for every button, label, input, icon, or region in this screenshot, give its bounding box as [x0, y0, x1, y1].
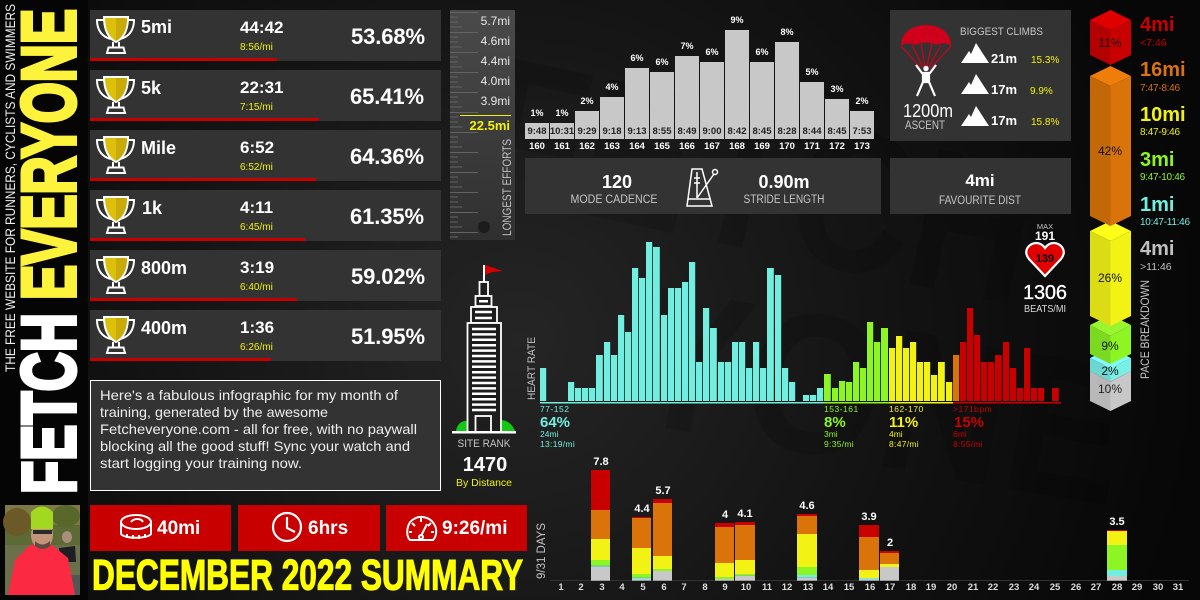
zone label: 153-161: [824, 404, 859, 449]
chart: cadence histogram: 1%: [530, 108, 544, 118]
icon: speedometer: [407, 517, 436, 540]
panel: 5mi record: 53.68%: [351, 24, 425, 49]
bars: zone 77-152: [540, 242, 823, 401]
icon: clock: [273, 513, 301, 541]
panel: 5k record: [90, 70, 441, 121]
panel: mile record: 6:52/mi: [240, 162, 273, 173]
pace legend: 1mi: [1140, 194, 1174, 216]
bar: pace transition: [953, 355, 959, 401]
day labels: 19: [926, 582, 936, 593]
panel: 5mi record: [90, 10, 441, 61]
text block: intro: Here's a fabulous infographic for my month of: [100, 387, 398, 403]
day labels: 23: [1009, 582, 1019, 593]
day labels: 30: [1153, 582, 1163, 593]
panel: cadence and stride: MODE CADENCE: [570, 194, 658, 206]
day labels: 7: [681, 582, 687, 593]
heart rate summary: [1023, 222, 1067, 315]
zone label: over 171: >171bpm: [953, 404, 992, 414]
panel: 400m record: 51.95%: [351, 324, 425, 349]
segment: under 7:46: [1090, 10, 1131, 65]
panel: longest efforts ruler: 3.9mi: [481, 94, 510, 108]
bar: day 16: 3.9: [861, 511, 877, 523]
stat: total time: [238, 505, 380, 551]
panel: cadence and stride: STRIDE LENGTH: [744, 194, 824, 206]
panel: longest efforts ruler: 4.4mi: [481, 54, 510, 68]
chart: cadence histogram: 2%: [855, 96, 869, 106]
day labels: 11: [762, 582, 773, 593]
day labels: 25: [1050, 582, 1061, 593]
day labels: 16: [865, 582, 875, 593]
day labels: 2: [578, 582, 584, 593]
chart: cadence histogram: 9:48: [527, 126, 547, 137]
title: DECEMBER 2022 SUMMARY: [92, 552, 523, 600]
bar: day 17: [880, 537, 899, 581]
zone label: over 171: 8:55/mi: [953, 439, 983, 449]
chart: daily distance: [536, 456, 1189, 593]
segment: 10:47-11:46: [1090, 348, 1131, 381]
text block: intro: [90, 380, 440, 490]
panel: ascent and climbs: 17m: [991, 113, 1017, 128]
bar: day 28: [1107, 516, 1127, 581]
background watermark: [461, 14, 1144, 549]
stat: total distance: [90, 505, 231, 551]
panel: favourite distance: 4mi: [965, 171, 995, 190]
bar: day 16: [859, 511, 879, 581]
day labels: 18: [906, 582, 916, 593]
chart: cadence histogram: 8%: [780, 27, 794, 37]
chart: cadence histogram: 9:13: [627, 126, 647, 137]
segment: over 11:46: [1090, 361, 1131, 411]
day labels: 15: [844, 582, 855, 593]
heart rate summary: BEATS/MI: [1024, 304, 1066, 315]
chart: cadence histogram: 161: [554, 141, 571, 152]
panel: ascent and climbs: 1200m: [903, 101, 953, 121]
chart: cadence histogram: 6%: [630, 53, 644, 63]
day labels: 26: [1071, 582, 1081, 593]
panel: ascent and climbs: BIGGEST CLIMBS: [960, 26, 1043, 38]
panel: 5mi record: 5mi: [141, 17, 172, 37]
chart: heart rate: [526, 242, 1061, 449]
day labels: 22: [988, 582, 998, 593]
panel: 400m record: [90, 310, 441, 361]
icon: trophy: [97, 197, 134, 233]
heart rate summary: 191: [1035, 229, 1055, 243]
pace legend: 7:47-8:46: [1140, 83, 1180, 94]
panel: ascent and climbs: 17m: [991, 82, 1017, 97]
chart: cadence histogram: 10:31: [550, 126, 575, 137]
panel: 800m record: 800m: [141, 258, 187, 278]
chart: cadence histogram: 162: [579, 141, 595, 152]
stat: average pace: 9:26/mi: [442, 518, 507, 539]
icon: heart: [1026, 243, 1064, 276]
panel: 1k record: 6:45/mi: [240, 222, 273, 233]
day labels: 13: [803, 582, 813, 593]
chart: cadence histogram: 8:42: [727, 126, 747, 137]
logo: fetcheveryone: [7, 9, 92, 494]
bar: day 5: 4.4: [634, 503, 651, 515]
panel: 1k record: 61.35%: [350, 204, 424, 229]
chart: cadence histogram: 8:45: [827, 126, 847, 137]
bar: day 17: 2: [887, 537, 893, 549]
chart: cadence histogram: 168: [729, 141, 745, 152]
zone label: over 171: 6mi: [953, 429, 967, 439]
zone label: 77-152: 64%: [540, 414, 570, 431]
heart rate summary: 139: [1036, 253, 1054, 265]
panel: 400m record: 1:36: [240, 318, 274, 337]
icon: trophy: [97, 317, 134, 353]
chart: cadence histogram: 7:53: [852, 126, 872, 137]
panel: ascent and climbs: 9.9%: [1030, 86, 1053, 97]
icon: trophy: [97, 257, 134, 293]
zone label: over 171: [953, 404, 992, 449]
zone label: over 171: 15%: [954, 414, 984, 431]
chart: cadence histogram: 166: [679, 141, 695, 152]
day labels: 10: [741, 582, 751, 593]
segment: 10:47-11:46: 2%: [1101, 364, 1119, 378]
day labels: 21: [968, 582, 979, 593]
icon: mountain: [961, 74, 989, 94]
panel: mile record: [90, 130, 441, 181]
zone label: 153-161: 9:35/mi: [824, 439, 854, 449]
heart rate summary: MAX: [1037, 222, 1053, 231]
chart: cadence histogram: 171: [804, 141, 821, 152]
zone label: 77-152: 77-152: [540, 404, 569, 414]
panel: 5mi record: 44:42: [240, 18, 283, 37]
day labels: [558, 582, 1184, 593]
segment: under 7:46: 11%: [1098, 36, 1122, 50]
bar: day 3: [591, 456, 610, 581]
chart: pace breakdown stack: [1090, 10, 1131, 411]
day labels: 20: [947, 582, 957, 593]
icon: mountain: [961, 43, 989, 63]
site rank text: By Distance: [456, 477, 512, 489]
segment: over 11:46: 10%: [1098, 382, 1122, 396]
chart: cadence histogram: 6%: [755, 47, 769, 57]
day labels: 9: [722, 582, 728, 593]
chart: cadence histogram: 9:29: [577, 126, 597, 137]
bar: day 10: [735, 508, 755, 581]
chart: cadence histogram: 9:18: [602, 126, 622, 137]
panel: mile record: 64.36%: [350, 144, 424, 169]
zone label: 153-161: 153-161: [824, 404, 859, 414]
icon: trophy: [97, 17, 134, 53]
background watermark: FETCH: [461, 14, 1055, 348]
chart: cadence histogram: 6%: [705, 47, 719, 57]
zone label: 162-170: 162-170: [889, 404, 924, 414]
day labels: 27: [1091, 582, 1101, 593]
pace legend: <7:46: [1140, 37, 1167, 49]
panel: mile record: 6:52: [240, 138, 274, 157]
chart: cadence histogram: 9:00: [702, 126, 722, 137]
day labels: 5: [640, 582, 646, 593]
bar: day 13: 4.6: [799, 500, 815, 512]
chart: cadence histogram: 2%: [580, 96, 594, 106]
chart: cadence histogram: 6%: [655, 57, 669, 67]
day labels: 6: [661, 582, 667, 593]
pace legend: 10mi: [1140, 104, 1186, 126]
panel: longest efforts ruler: 4.6mi: [481, 34, 510, 48]
pace legend: 3mi: [1140, 149, 1174, 171]
zone label: 77-152: 13:19/mi: [540, 439, 575, 449]
bars: zone over 171: [960, 308, 1059, 401]
site rank text: SITE RANK: [458, 438, 511, 450]
zone label: 162-170: [889, 404, 924, 449]
icon: mountain: [961, 106, 989, 126]
panel: 5k record: 7:15/mi: [240, 102, 273, 113]
axis: [550, 580, 1189, 582]
zone label: 162-170: 11%: [889, 414, 918, 431]
pace legend: 16mi: [1140, 59, 1186, 81]
panel: ascent and climbs: [890, 10, 1071, 141]
chart: cadence histogram: 8:55: [652, 126, 672, 137]
chart: cadence histogram: 8:45: [752, 126, 772, 137]
zone label: 153-161: 3mi: [824, 429, 838, 439]
zone label: 162-170: 4mi: [889, 429, 903, 439]
day labels: 4: [619, 582, 625, 593]
icon: trophy: [97, 137, 134, 173]
pace legend: 8:47-9:46: [1140, 127, 1180, 138]
site rank text: [456, 438, 512, 489]
chart: cadence histogram: 173: [854, 141, 870, 152]
segment: 9:47-10:46: [1090, 315, 1131, 364]
day labels: 3: [599, 582, 605, 593]
panel: ascent and climbs: 15.8%: [1031, 117, 1059, 128]
icon: metronome: [687, 169, 718, 206]
panel: mile record: Mile: [141, 138, 176, 158]
pace legend: 9:47-10:46: [1140, 172, 1185, 183]
panel: favourite distance: FAVOURITE DIST: [939, 195, 1021, 207]
chart: cadence histogram: 5%: [805, 67, 819, 77]
panel: 400m record: 400m: [141, 318, 187, 338]
stat: average pace: [386, 505, 527, 551]
panel: 1k record: 1k: [142, 198, 163, 218]
day labels: 12: [782, 582, 792, 593]
stat: total time: 6hrs: [308, 518, 348, 539]
panel: cadence and stride: 120: [602, 172, 632, 192]
left black band: [0, 0, 88, 600]
bars: zone 162-170: [889, 336, 952, 401]
chart: heart rate: HEART RATE: [526, 337, 538, 400]
day labels: 1: [558, 582, 564, 593]
icon: parachute: [901, 25, 951, 96]
panel: 800m record: 6:40/mi: [240, 282, 273, 293]
panel: longest efforts ruler: 22.5mi: [470, 118, 510, 133]
panel: ascent and climbs: ASCENT: [905, 120, 945, 132]
bar: day 13: [797, 500, 817, 581]
panel: 800m record: [90, 250, 441, 301]
text block: intro: training, generated by the awesome: [100, 404, 328, 420]
panel: 5k record: 5k: [141, 78, 162, 98]
icon: skyscraper site rank: [452, 265, 516, 434]
panel: longest efforts ruler: LONGEST EFFORTS: [502, 139, 514, 236]
segment: 8:47-9:46: [1090, 221, 1131, 326]
bar: day 28: 3.5: [1109, 516, 1125, 528]
text block: intro: blocking all the good stuff! Sync your watch and: [100, 438, 410, 454]
segment: 7:47-8:46: [1090, 66, 1131, 226]
background watermark: YONE: [613, 243, 1144, 549]
site rank text: 1470: [463, 454, 507, 476]
day labels: 31: [1173, 582, 1184, 593]
chart: cadence histogram: 1%: [555, 108, 569, 118]
pace legend: 4mi: [1140, 238, 1174, 260]
zone label: 77-152: 24mi: [540, 429, 559, 439]
stat: total distance: 40mi: [157, 518, 200, 539]
bar: day 6: [653, 485, 672, 581]
panel: 5k record: 65.41%: [350, 84, 424, 109]
photo: runner portrait: [3, 505, 80, 595]
bar: day 9: 4: [722, 509, 729, 521]
segment: 8:47-9:46: 26%: [1098, 271, 1122, 285]
panel: 800m record: 59.02%: [351, 264, 425, 289]
day labels: 29: [1132, 582, 1142, 593]
chart: cadence histogram: 170: [779, 141, 795, 152]
chart: cadence histogram: 167: [704, 141, 720, 152]
segment: 9:47-10:46: 9%: [1101, 339, 1119, 353]
bar: day 6: 5.7: [655, 485, 671, 497]
pace legend: PACE BREAKDOWN: [1140, 280, 1152, 379]
chart: cadence histogram: 165: [654, 141, 671, 152]
chart: cadence histogram: 4%: [605, 82, 619, 92]
pace legend: 10:47-11:46: [1140, 217, 1190, 228]
day labels: 17: [885, 582, 895, 593]
chart: cadence histogram: [525, 15, 874, 152]
icon: trophy: [97, 77, 134, 113]
bar: day 9: [715, 509, 734, 581]
logo: fetcheveryone: FETCH: [7, 313, 92, 494]
chart: daily distance: 9/31 DAYS: [536, 523, 548, 579]
icon: tape measure: [121, 515, 151, 539]
chart: cadence histogram: 8:44: [802, 126, 822, 137]
chart: cadence histogram: 9%: [730, 15, 744, 25]
day labels: 8: [702, 582, 708, 593]
chart: cadence histogram: 163: [604, 141, 620, 152]
panel: 5mi record: 8:56/mi: [240, 42, 273, 53]
zone label: 77-152: [540, 404, 575, 449]
panel: 400m record: 6:26/mi: [240, 342, 273, 353]
bars: zone 153-161: [824, 322, 888, 401]
chart: cadence histogram: 3%: [830, 84, 844, 94]
segment: 7:47-8:46: 42%: [1098, 144, 1122, 158]
zone label: 162-170: 8:47/mi: [889, 439, 919, 449]
text block: intro: Fetcheveryone.com - all for free, with no paywall: [100, 421, 417, 437]
pace legend: >11:46: [1140, 261, 1172, 273]
chart: cadence histogram: 172: [829, 141, 845, 152]
pace legend: [1140, 14, 1190, 379]
panel: ascent and climbs: 15.3%: [1031, 55, 1059, 66]
bar: day 10: 4.1: [737, 508, 753, 520]
panel: longest efforts ruler: 5.7mi: [481, 14, 510, 28]
panel: cadence and stride: [525, 158, 881, 214]
day labels: 28: [1112, 582, 1122, 593]
panel: 800m record: 3:19: [240, 258, 274, 277]
panel: 1k record: [90, 190, 441, 241]
panel: 1k record: 4:11: [240, 198, 273, 217]
panel: 5k record: 22:31: [240, 78, 283, 97]
chart: cadence histogram: 160: [529, 141, 545, 152]
panel: favourite distance: [890, 158, 1071, 214]
day labels: 14: [823, 582, 834, 593]
pace legend: 4mi: [1140, 14, 1174, 36]
chart: cadence histogram: 169: [754, 141, 770, 152]
zone label: 153-161: 8%: [824, 414, 846, 431]
chart: cadence histogram: 164: [629, 141, 646, 152]
bar: day 3: 7.8: [593, 456, 609, 468]
panel: ascent and climbs: 21m: [991, 51, 1017, 66]
panel: longest efforts ruler: 4.0mi: [481, 74, 510, 88]
panel: cadence and stride: 0.90m: [758, 172, 810, 192]
text block: intro: start logging your training now.: [100, 455, 302, 471]
heart rate summary: 1306: [1023, 282, 1067, 304]
chart: cadence histogram: 8:28: [777, 126, 797, 137]
panel: longest efforts ruler: [450, 10, 515, 240]
bar: day 5: [632, 503, 651, 581]
chart: cadence histogram: 7%: [680, 41, 694, 51]
day labels: 24: [1029, 582, 1040, 593]
chart: cadence histogram: 8:49: [677, 126, 697, 137]
